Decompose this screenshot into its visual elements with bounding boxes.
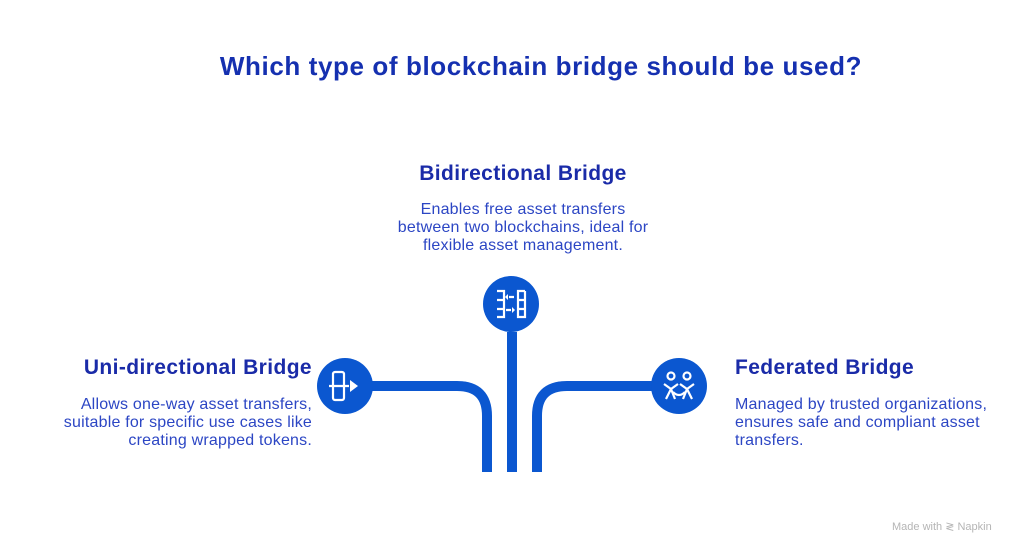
lines bbox=[372, 332, 652, 472]
watermark: Made with ≷ Napkin bbox=[892, 521, 992, 533]
title: Which type of blockchain bridge should be used? bbox=[220, 51, 862, 81]
text: federated: ensures safe and compliant asset bbox=[735, 414, 980, 431]
icon: federated bbox=[651, 358, 707, 414]
text: bidirectional: flexible asset management. bbox=[423, 237, 623, 254]
text: federated bbox=[735, 396, 987, 449]
text: uni-directional: suitable for specific use cases like bbox=[64, 414, 312, 431]
text: uni-directional: Allows one-way asset transfers, bbox=[81, 396, 312, 413]
heading: federated: Federated Bridge bbox=[735, 356, 914, 379]
text: uni-directional bbox=[64, 396, 312, 449]
icon: uni-directional bbox=[317, 358, 373, 414]
text: bidirectional: Enables free asset transfers bbox=[421, 201, 625, 218]
icon: bidirectional bbox=[483, 276, 539, 332]
text: bidirectional bbox=[398, 201, 648, 254]
text: federated: Managed by trusted organizations, bbox=[735, 396, 987, 413]
heading: uni-directional: Uni-directional Bridge bbox=[84, 356, 312, 379]
text: federated: transfers. bbox=[735, 432, 804, 449]
heading: bidirectional: Bidirectional Bridge bbox=[419, 162, 627, 185]
text: bidirectional: between two blockchains, ideal for bbox=[398, 219, 648, 236]
text: uni-directional: creating wrapped tokens. bbox=[128, 432, 312, 449]
